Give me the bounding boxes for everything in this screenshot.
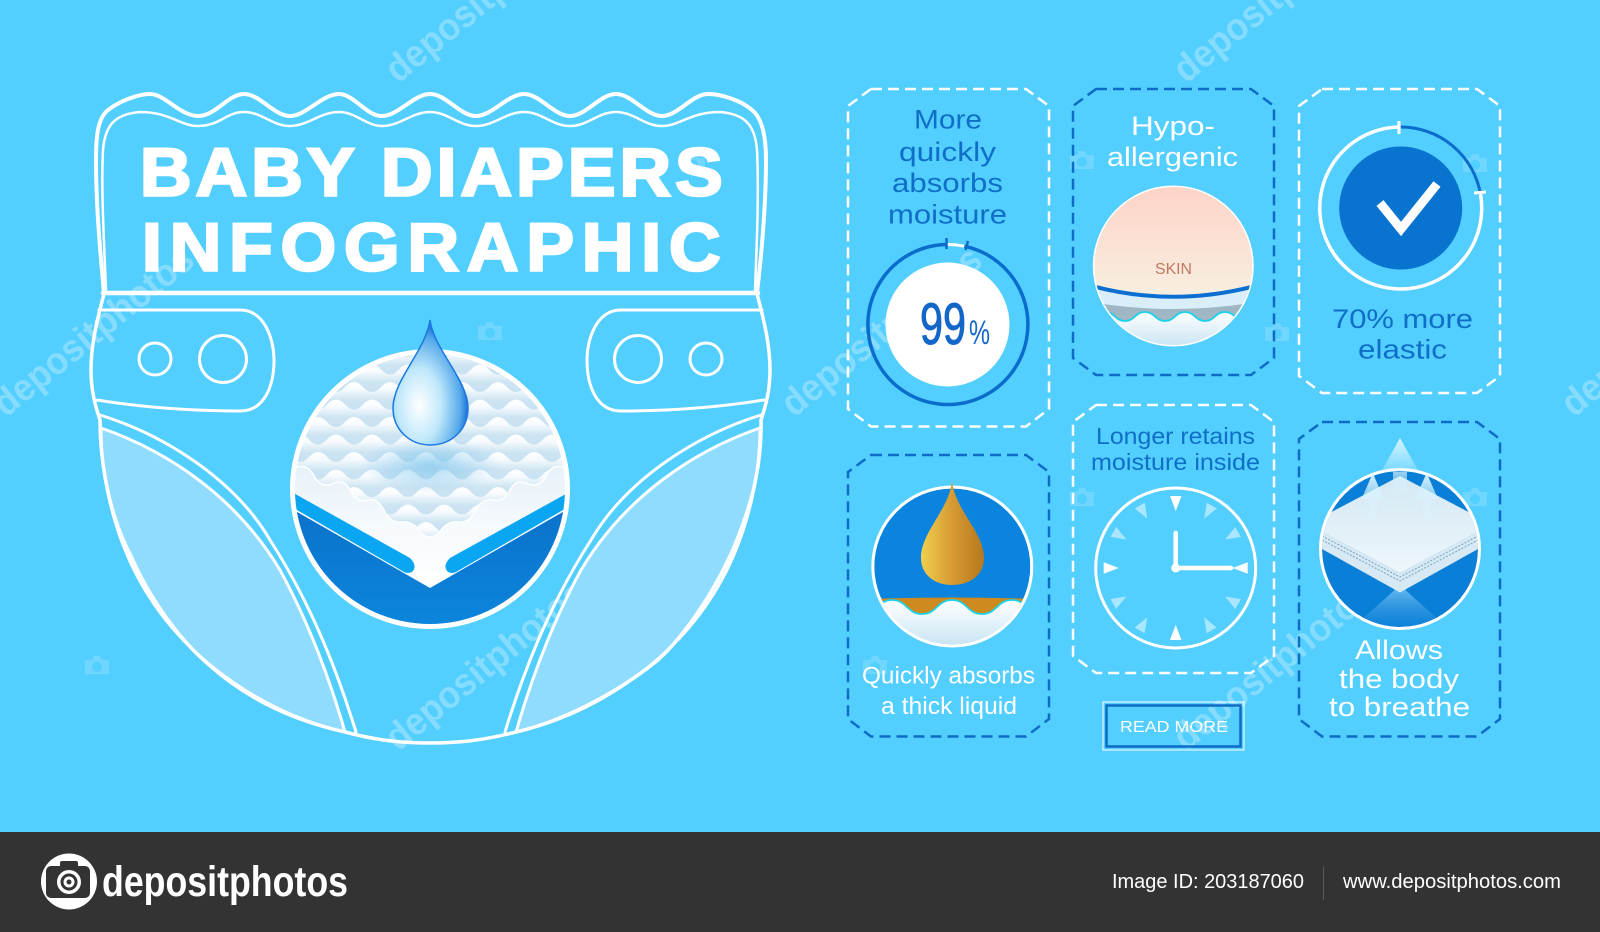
- water drop: [393, 320, 468, 445]
- heading: moisture: [888, 200, 1007, 230]
- panel: hypo-allergenic: [1073, 89, 1274, 375]
- air arrows: [1362, 438, 1438, 520]
- heading: Longer retains: [1096, 423, 1255, 449]
- diaper illustration: [91, 94, 770, 743]
- 99 percent gauge: [868, 238, 1028, 404]
- skin layers circle: SKIN: [1155, 261, 1192, 278]
- read more button: [1103, 702, 1244, 750]
- gold drop: [921, 481, 984, 585]
- caption: [1329, 635, 1470, 722]
- diaper outline: [91, 94, 770, 743]
- heading: More: [914, 104, 982, 134]
- clock icon: [1096, 488, 1256, 648]
- caption: a thick liquid: [881, 693, 1017, 720]
- watermark layer: depositphotos: [377, 572, 594, 759]
- panel: quickly absorbs a thick liquid: [848, 455, 1049, 736]
- heading: [1091, 423, 1260, 475]
- watermark layer: depositphotos: [1165, 572, 1382, 759]
- panel: allows the body to breathe: [1299, 422, 1500, 736]
- footer bar: [0, 832, 1600, 932]
- elastic gauge with check mark: [1320, 121, 1486, 289]
- heading: moisture inside: [1091, 449, 1260, 475]
- heading: [888, 104, 1007, 230]
- caption: Allows: [1355, 635, 1443, 665]
- heading: [1107, 111, 1238, 172]
- caption: Quickly absorbs: [862, 663, 1035, 690]
- leg panels: [101, 428, 760, 732]
- heading: allergenic: [1107, 142, 1238, 172]
- 99 percent gauge: %: [969, 314, 990, 352]
- footer logo icon: [41, 854, 97, 910]
- watermark layer: depositphotos: [773, 238, 990, 425]
- 99 percent gauge: 99: [920, 292, 966, 357]
- breathable sheet circle: [1320, 438, 1480, 635]
- panel: longer retains moisture inside: [1073, 405, 1274, 673]
- title: BABY DIAPERS: [140, 134, 723, 210]
- caption: elastic: [1358, 334, 1447, 364]
- absorbent layer circle: [285, 320, 575, 640]
- caption: [862, 663, 1035, 720]
- caption: 70% more: [1332, 304, 1473, 334]
- caption: to breathe: [1329, 692, 1470, 722]
- snap circles: [139, 336, 722, 382]
- footer brand name: depositphotos: [102, 858, 348, 906]
- title: INFOGRAPHIC: [142, 209, 721, 285]
- panel: more quickly absorbs moisture: [848, 89, 1049, 426]
- title: [140, 134, 723, 285]
- read more button: READ MORE: [1120, 719, 1228, 736]
- heading: quickly: [899, 137, 997, 167]
- caption: [1332, 304, 1473, 364]
- heading: Hypo-: [1131, 111, 1215, 141]
- image id: Image ID: 203187060: [1112, 871, 1304, 893]
- skin layers circle: [1092, 186, 1254, 346]
- website: www.depositphotos.com: [1342, 871, 1561, 893]
- heading: absorbs: [892, 168, 1003, 198]
- caption: the body: [1339, 664, 1460, 694]
- panel: 70% more elastic: [1299, 89, 1500, 393]
- liquid absorption circle: [871, 481, 1034, 648]
